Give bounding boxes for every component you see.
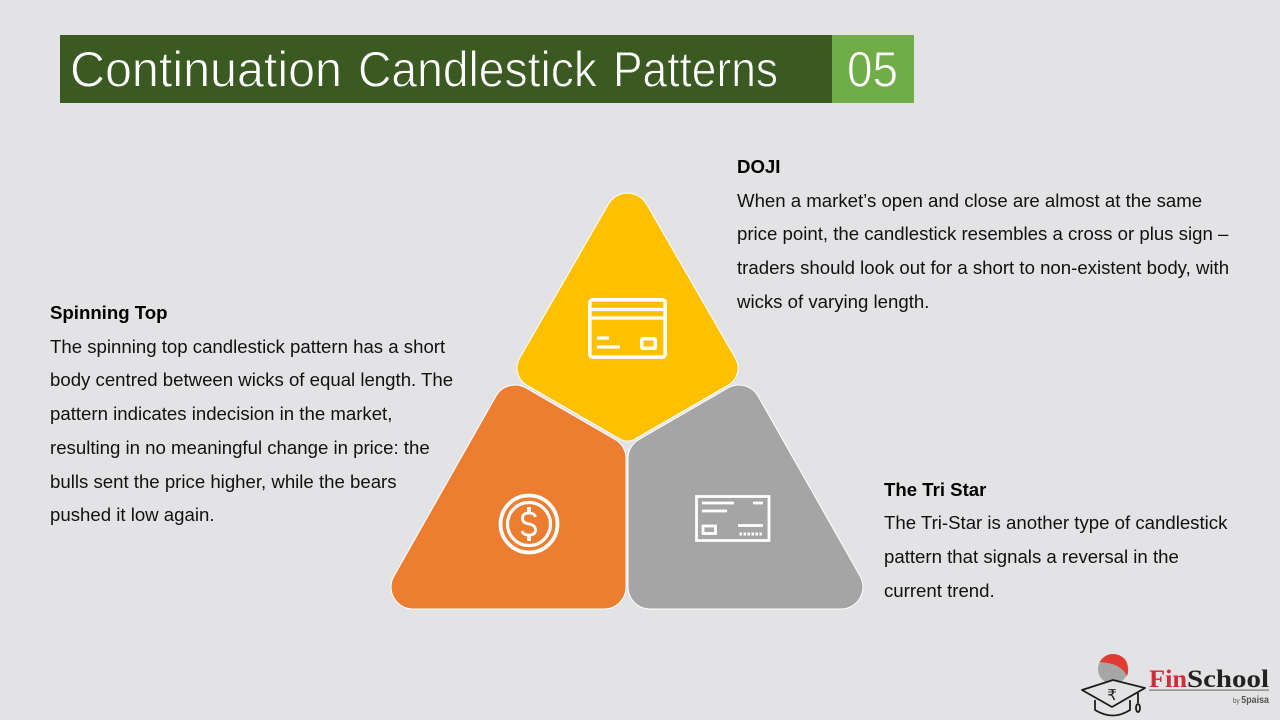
icon: dollar coin — [500, 496, 558, 552]
text block: The Tri Star: pattern that signals a reversal in the — [884, 546, 1179, 567]
text block: DOJI — [737, 156, 1229, 312]
text block: Spinning Top: resulting in no meaningful change in price: the — [50, 437, 430, 458]
heading: Spinning Top: Spinning Top — [50, 302, 167, 323]
icon: rupee sign on cap: ₹ — [1107, 686, 1117, 704]
text block: Spinning Top: body centred between wicks of equal length. The — [50, 369, 453, 390]
wordmark: School — [1187, 664, 1269, 693]
text block: Spinning Top: pushed it low again. — [50, 504, 214, 525]
title banner: Continuation — [70, 42, 342, 98]
text block: Spinning Top: pattern indicates indecision in the market, — [50, 403, 392, 424]
text block: Spinning Top: bulls sent the price higher, while the bears — [50, 471, 397, 492]
text block: The Tri Star: The Tri-Star is another type of candlestick — [884, 512, 1227, 533]
text block: Spinning Top: The spinning top candlestick pattern has a short — [50, 336, 445, 357]
title banner: Candlestick — [358, 42, 598, 98]
icon: bank card — [696, 496, 769, 540]
wordmark: by 5paisa — [1233, 695, 1269, 706]
heading: The Tri Star: The Tri Star — [884, 478, 986, 500]
text block: Spinning Top — [50, 302, 453, 525]
icon: globe — [1098, 654, 1128, 684]
text block: DOJI: price point, the candlestick resembles a cross or plus sign – — [737, 223, 1228, 244]
heading: DOJI: DOJI — [737, 156, 780, 177]
text block: The Tri Star — [884, 478, 1228, 601]
text block: DOJI: traders should look out for a short to non-existent body, with — [737, 257, 1229, 278]
icon: graduation cap — [1082, 680, 1145, 716]
text block: The Tri Star: current trend. — [884, 580, 995, 601]
segment: yellow — [517, 193, 738, 441]
title banner — [60, 35, 914, 103]
logo: FinSchool by 5paisa — [1081, 654, 1269, 716]
title banner: Patterns — [613, 42, 778, 98]
title banner: 05 — [847, 42, 898, 98]
icon: credit card — [590, 300, 665, 357]
wordmark: Fin — [1149, 664, 1187, 693]
text block: DOJI: When a market’s open and close are almost at the same — [737, 190, 1202, 211]
wordmark — [1149, 664, 1269, 706]
segment: orange — [391, 385, 626, 609]
segment: gray — [628, 385, 863, 609]
text block: DOJI: wicks of varying length. — [737, 291, 929, 312]
